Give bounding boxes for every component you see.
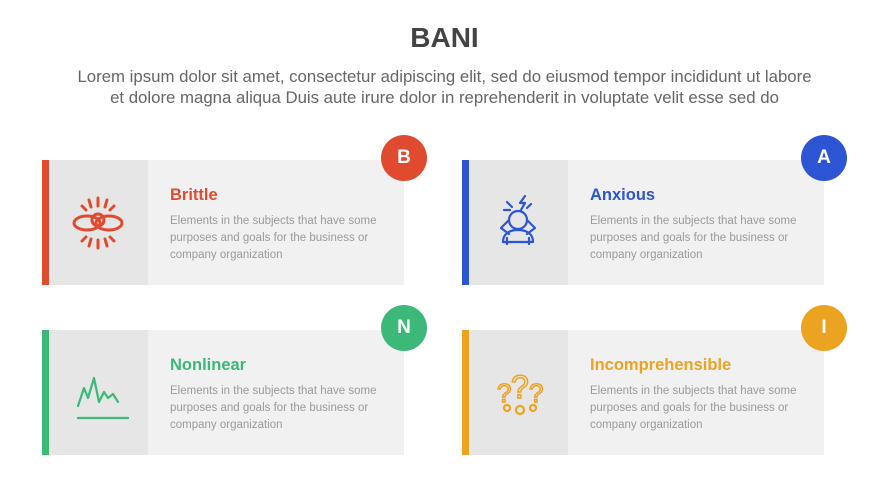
- badge I: [801, 305, 847, 351]
- heading: Anxious: [590, 186, 655, 204]
- badge B: [381, 135, 427, 181]
- icon: question marks: ?: [497, 378, 511, 408]
- heading: Incomprehensible: [590, 356, 731, 374]
- icon: question marks: ?: [511, 369, 529, 405]
- panel: incomprehensible: [462, 330, 824, 455]
- text block: Elements in the subjects that have some purposes and goals for the business or company organization: [590, 215, 796, 261]
- icon: question marks: [469, 330, 568, 455]
- icon: broken chain: [49, 160, 148, 285]
- title: BANI: [410, 22, 479, 53]
- text block: Elements in the subjects that have some purposes and goals for the business or company organization: [170, 215, 376, 261]
- text block: Elements in the subjects that have some purposes and goals for the business or company organization: [590, 385, 796, 431]
- badge A: [801, 135, 847, 181]
- icon: question marks: ?: [529, 378, 543, 408]
- badge N: N: [397, 317, 411, 338]
- icon: anxious person: [469, 160, 568, 285]
- heading: Brittle: [170, 186, 218, 204]
- subtitle: et dolore magna aliqua Duis aute irure dolor in reprehenderit in voluptate velit esse sed do: [110, 88, 779, 107]
- heading: Nonlinear: [170, 356, 246, 374]
- panel: anxious: [462, 160, 824, 285]
- panel: nonlinear: [42, 330, 404, 455]
- badge I: I: [821, 317, 827, 338]
- subtitle: Lorem ipsum dolor sit amet, consectetur adipiscing elit, sed do eiusmod tempor incididunt ut labore: [77, 67, 812, 86]
- badge N: [381, 305, 427, 351]
- icon: nonlinear chart: [49, 330, 148, 455]
- text block: Elements in the subjects that have some purposes and goals for the business or company organization: [170, 385, 376, 431]
- subtitle: [77, 67, 812, 107]
- badge A: A: [817, 147, 831, 168]
- panel: brittle: [42, 160, 404, 285]
- badge B: B: [397, 147, 411, 168]
